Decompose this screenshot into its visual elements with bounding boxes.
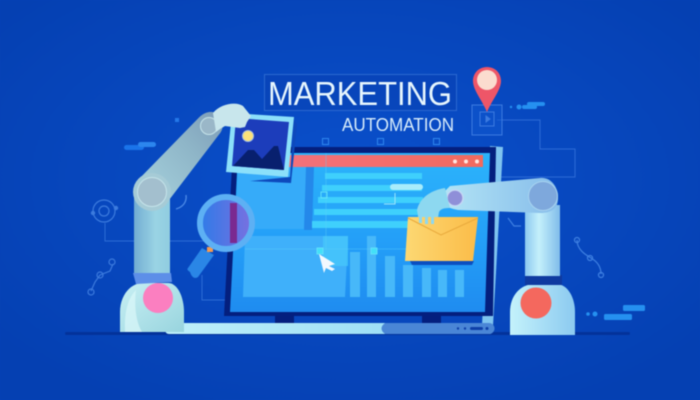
- heading: automation: AUTOMATION: [342, 115, 454, 135]
- laptop feet: [275, 316, 441, 323]
- icon: right node path: [508, 218, 604, 278]
- elbow: [133, 173, 171, 211]
- frame: [226, 113, 294, 177]
- icon: left node path: [88, 259, 115, 295]
- column: [525, 205, 560, 276]
- mountains: [233, 146, 284, 170]
- arm: [438, 178, 558, 213]
- dashes: top right: [510, 102, 545, 110]
- envelope flap: [408, 218, 478, 235]
- handle: [187, 248, 214, 278]
- label pill: [390, 184, 423, 190]
- envelope shadow: [410, 261, 474, 265]
- heading: marketing: MARKETING: [268, 76, 452, 113]
- sidebar panel: [236, 167, 306, 229]
- large chart panel: [243, 236, 348, 297]
- title: [264, 74, 456, 135]
- magnifier: [187, 197, 252, 278]
- envelope body: [405, 217, 478, 261]
- screen frame: [224, 147, 496, 316]
- dashes: bottom right: [586, 305, 645, 320]
- robot arm: right: [417, 178, 575, 335]
- ring: [200, 197, 252, 249]
- frame shadow: [250, 119, 297, 183]
- upper arm: [138, 112, 223, 204]
- grid markers: [317, 192, 377, 254]
- base: [120, 283, 184, 332]
- base controls: [457, 327, 488, 330]
- robot arm: left: [120, 104, 251, 332]
- icon: arc arrow near left arm: [176, 195, 186, 209]
- icon: cursor: [319, 254, 335, 273]
- icon: target circles: [91, 200, 118, 222]
- dashes: left: [124, 118, 179, 150]
- wrist joint: [447, 190, 463, 206]
- screen display: [230, 153, 490, 312]
- content shade: [304, 167, 314, 230]
- floor shadow: [65, 332, 630, 335]
- pink button: [143, 283, 173, 313]
- photo frame: [226, 113, 297, 183]
- small plus markers: [322, 138, 440, 144]
- handle joint: [207, 247, 213, 252]
- text rows: [312, 173, 434, 228]
- wrist: [200, 118, 218, 134]
- laptop base: [165, 323, 495, 334]
- column: [134, 192, 170, 273]
- collar: [525, 275, 562, 285]
- screen side panel: [482, 146, 503, 326]
- header bar: [270, 155, 483, 167]
- circuit lines: [105, 120, 575, 300]
- base stripe: [125, 290, 142, 332]
- photo background: [232, 118, 289, 170]
- title box: [264, 74, 456, 110]
- base: [510, 284, 575, 335]
- laptop screen: [224, 146, 503, 326]
- corner mark: [384, 193, 395, 204]
- envelope: [405, 212, 478, 265]
- fingers: [419, 212, 434, 224]
- shoulder joint: [528, 182, 558, 210]
- window dots: [453, 160, 479, 164]
- highlight panel: [323, 236, 348, 266]
- sun: [242, 130, 254, 142]
- hand: [213, 104, 251, 132]
- icon: map pin: [473, 67, 501, 112]
- location squares: [472, 105, 502, 135]
- hand: [417, 188, 450, 224]
- collar: [133, 273, 172, 284]
- red button: [520, 288, 552, 318]
- guide lines: [245, 153, 430, 250]
- base dark section: [382, 323, 495, 334]
- chart bars: [350, 236, 464, 297]
- lens bar: [230, 203, 237, 243]
